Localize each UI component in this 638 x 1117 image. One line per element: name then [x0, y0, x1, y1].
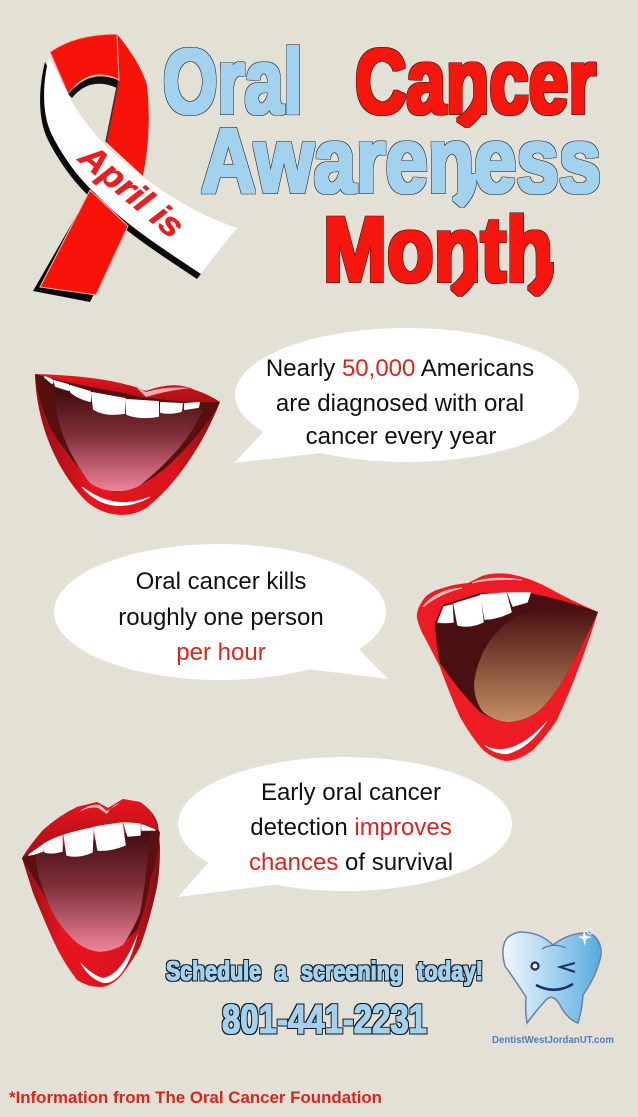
- text: call to action: today!: [417, 956, 483, 986]
- text: call to action: screening: [301, 956, 403, 986]
- text: second statistic: [118, 568, 324, 666]
- text: third statistic: chances of survival: [249, 849, 453, 876]
- panel: first mouth: [35, 374, 220, 515]
- label: website: DentistWestJordanUT.com: [492, 1034, 614, 1046]
- text: call to action: a: [275, 956, 288, 986]
- text: second statistic: Oral cancer kills: [136, 568, 306, 595]
- text: first statistic: cancer every year: [306, 423, 496, 450]
- text: second statistic: per hour: [176, 639, 266, 666]
- panel: second mouth: [417, 573, 598, 761]
- text: third statistic: [249, 779, 453, 876]
- panel: third mouth: [22, 799, 160, 987]
- label: April is: April is: [71, 136, 191, 246]
- title: Oral Cancer Awareness Month: [163, 31, 601, 301]
- text: source note: *Information from The Oral Cancer Foundation: [9, 1088, 382, 1107]
- text: third statistic: detection improves: [250, 814, 452, 841]
- text: call to action: Schedule: [166, 956, 261, 986]
- title: Oral Cancer Awareness Month: Month: [323, 199, 553, 301]
- title: Oral Cancer Awareness Month: Oral: [163, 31, 303, 133]
- text: first statistic: [266, 355, 534, 450]
- panel: third speech bubble: [178, 757, 512, 897]
- text: third statistic: Early oral cancer: [261, 779, 441, 806]
- text: first statistic: are diagnosed with oral: [276, 390, 524, 417]
- text: second statistic: roughly one person: [118, 604, 324, 631]
- text: call to action: 801-441-2231: [222, 996, 427, 1042]
- text: call to action: [166, 956, 483, 1042]
- panel: first speech bubble: [234, 328, 579, 463]
- text: first statistic: Nearly 50,000 Americans: [266, 355, 534, 382]
- icon: winking tooth logo: [492, 928, 614, 1046]
- panel: second speech bubble: [54, 544, 388, 680]
- icon: awareness ribbon: [33, 34, 237, 302]
